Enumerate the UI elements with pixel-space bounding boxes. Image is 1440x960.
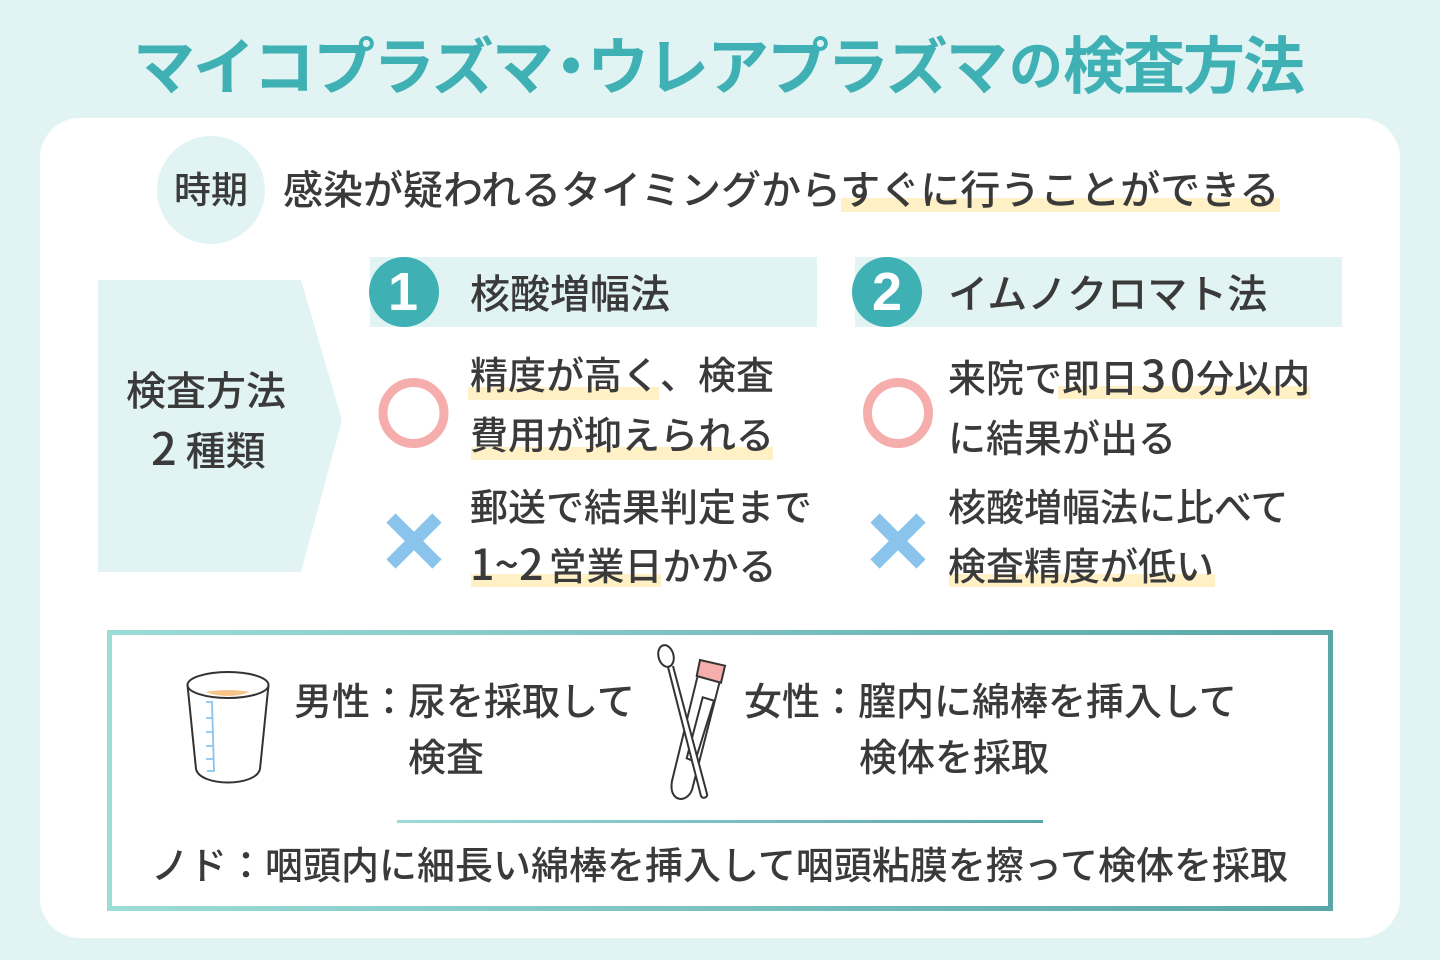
female text line 1: 女性：膣内に綿棒を挿入して	[744, 671, 1237, 726]
highlight: cost	[471, 447, 773, 460]
title: マイコプラズマ	[133, 17, 552, 107]
timing highlight	[841, 198, 1280, 212]
highlight: accuracy	[468, 387, 659, 400]
timing label: 時期	[174, 160, 248, 214]
method 2 name: イムノクロマト法	[948, 262, 1267, 320]
male text line 1: 男性：尿を採取して	[294, 671, 635, 726]
title: 検査方法	[1063, 16, 1303, 106]
divider	[397, 820, 1043, 823]
method 1 con line 1: 郵送で結果判定まで	[470, 477, 812, 532]
highlight: same day	[1058, 386, 1310, 399]
highlight: lower accuracy	[949, 574, 1215, 587]
method 2 header bar	[855, 257, 1342, 327]
method 1 number: 1	[388, 262, 418, 322]
method 2 number: 2	[872, 262, 902, 322]
method 2 number badge	[852, 257, 922, 327]
highlight: days	[471, 574, 661, 587]
timing badge	[157, 136, 265, 244]
title: の	[1009, 22, 1063, 101]
method 2 pro line 1: 来院で即日30分以内	[948, 341, 1310, 405]
icon: circle 2	[863, 378, 933, 448]
method 1 number badge	[369, 257, 439, 327]
arrow panel text: 検査方法	[126, 359, 286, 417]
method 1 con line 2: 1~2営業日かかる	[470, 531, 777, 593]
title: ウレアプラズマ	[587, 17, 1006, 107]
arrow panel: test methods	[98, 280, 342, 572]
panel: specimen collection	[107, 630, 1333, 911]
male text line 2: 検査	[408, 727, 484, 782]
method 2 con line 1: 核酸増幅法に比べて	[948, 477, 1288, 532]
icon: swab and test tube	[657, 644, 726, 800]
method 2 pro line 2: に結果が出る	[948, 408, 1176, 463]
icon: cross 1	[386, 514, 442, 568]
icon: circle 1	[378, 378, 448, 448]
timing text: 感染が疑われるタイミングからすぐに行うことができる	[283, 158, 1279, 216]
icon: urine cup	[186, 671, 270, 784]
method 1 pro line 2: 費用が抑えられる	[470, 405, 774, 460]
method 1 name: 核酸増幅法	[470, 262, 670, 320]
method 2 con line 2: 検査精度が低い	[948, 536, 1214, 591]
title: ・	[540, 17, 600, 107]
nasopharyngeal text: ノド：咽頭内に細長い綿棒を挿入して咽頭粘膜を擦って検体を採取	[151, 835, 1288, 890]
female text line 2: 検体を採取	[859, 727, 1049, 782]
method 1 pro line 1: 精度が高く、検査	[470, 345, 774, 400]
method 1 header bar	[370, 257, 817, 327]
title	[133, 16, 1304, 107]
arrow panel count: 2種類	[151, 413, 266, 478]
icon: cross 2	[870, 514, 926, 568]
